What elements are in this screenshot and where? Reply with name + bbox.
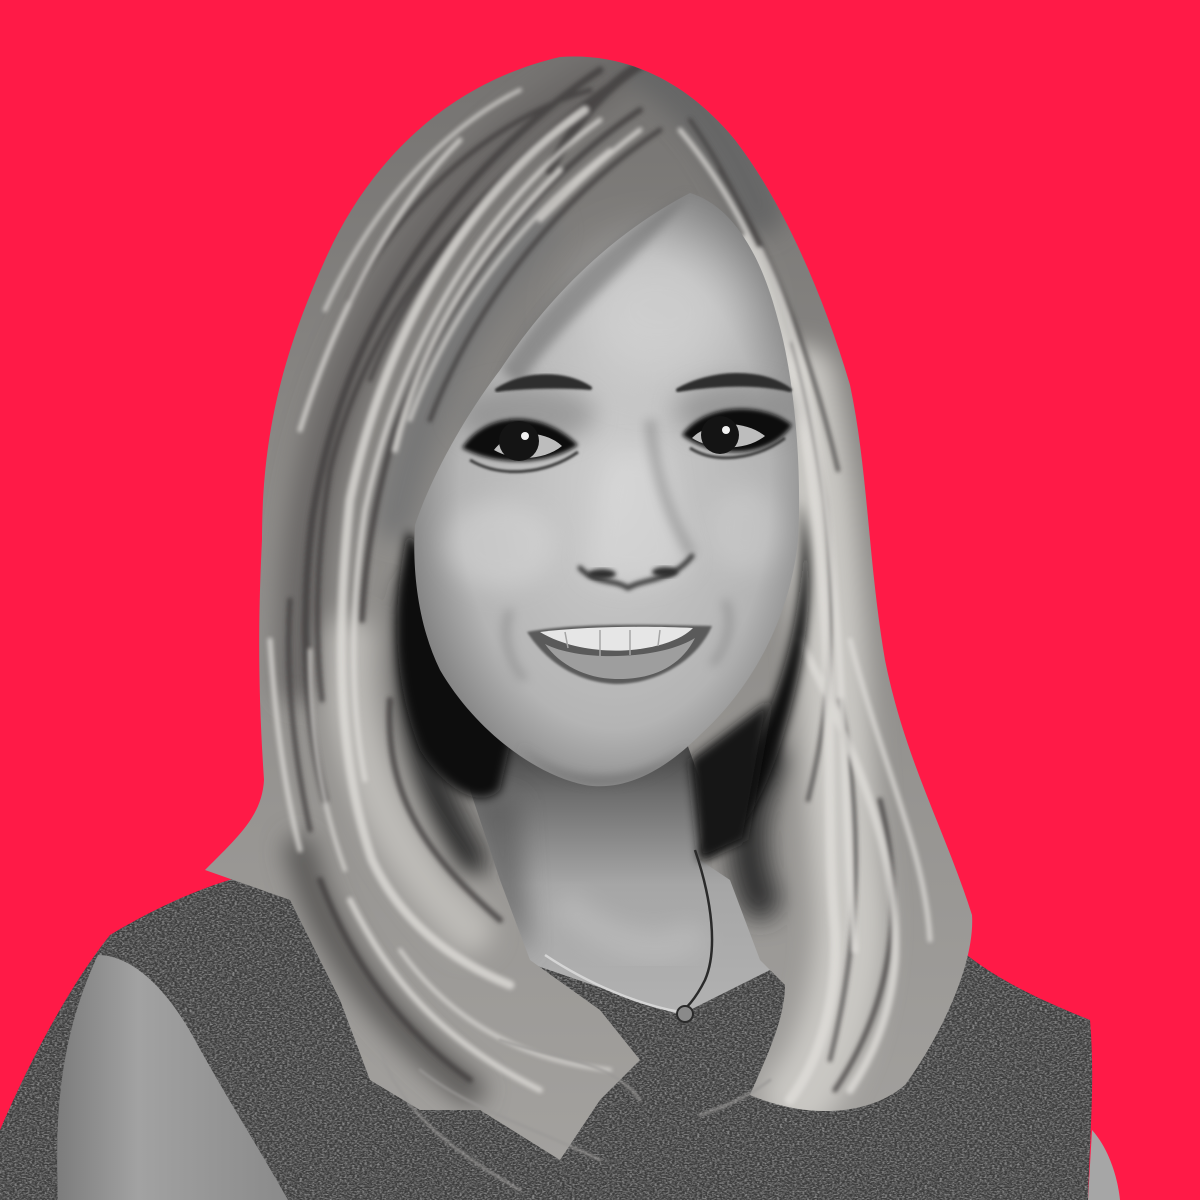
forehead hair shadow bbox=[500, 193, 690, 385]
right eye bbox=[682, 409, 792, 458]
left eyebrow bbox=[497, 376, 590, 390]
neck and chest bbox=[460, 720, 790, 1020]
right eyebrow bbox=[678, 375, 790, 390]
right arm bbox=[1088, 1130, 1120, 1200]
hair light strands bbox=[270, 90, 930, 1100]
hair dark strands bbox=[289, 65, 893, 1090]
chin shadow bbox=[520, 745, 690, 784]
forehead highlight bbox=[575, 240, 745, 380]
sleeveless top bbox=[0, 860, 1100, 1200]
nose bbox=[580, 420, 692, 588]
face bbox=[414, 193, 799, 786]
cheek highlights bbox=[445, 500, 555, 590]
smile bbox=[527, 625, 712, 684]
hair bbox=[205, 57, 972, 1190]
shadow around the face bbox=[397, 500, 809, 860]
hair tonal zones bbox=[300, 60, 851, 1095]
eye socket shading bbox=[455, 385, 595, 445]
left eye bbox=[462, 419, 578, 472]
necklace bbox=[545, 850, 712, 1022]
loose hair wisps bbox=[380, 1040, 770, 1190]
smile lines bbox=[506, 600, 729, 680]
bare left arm bbox=[57, 955, 288, 1200]
